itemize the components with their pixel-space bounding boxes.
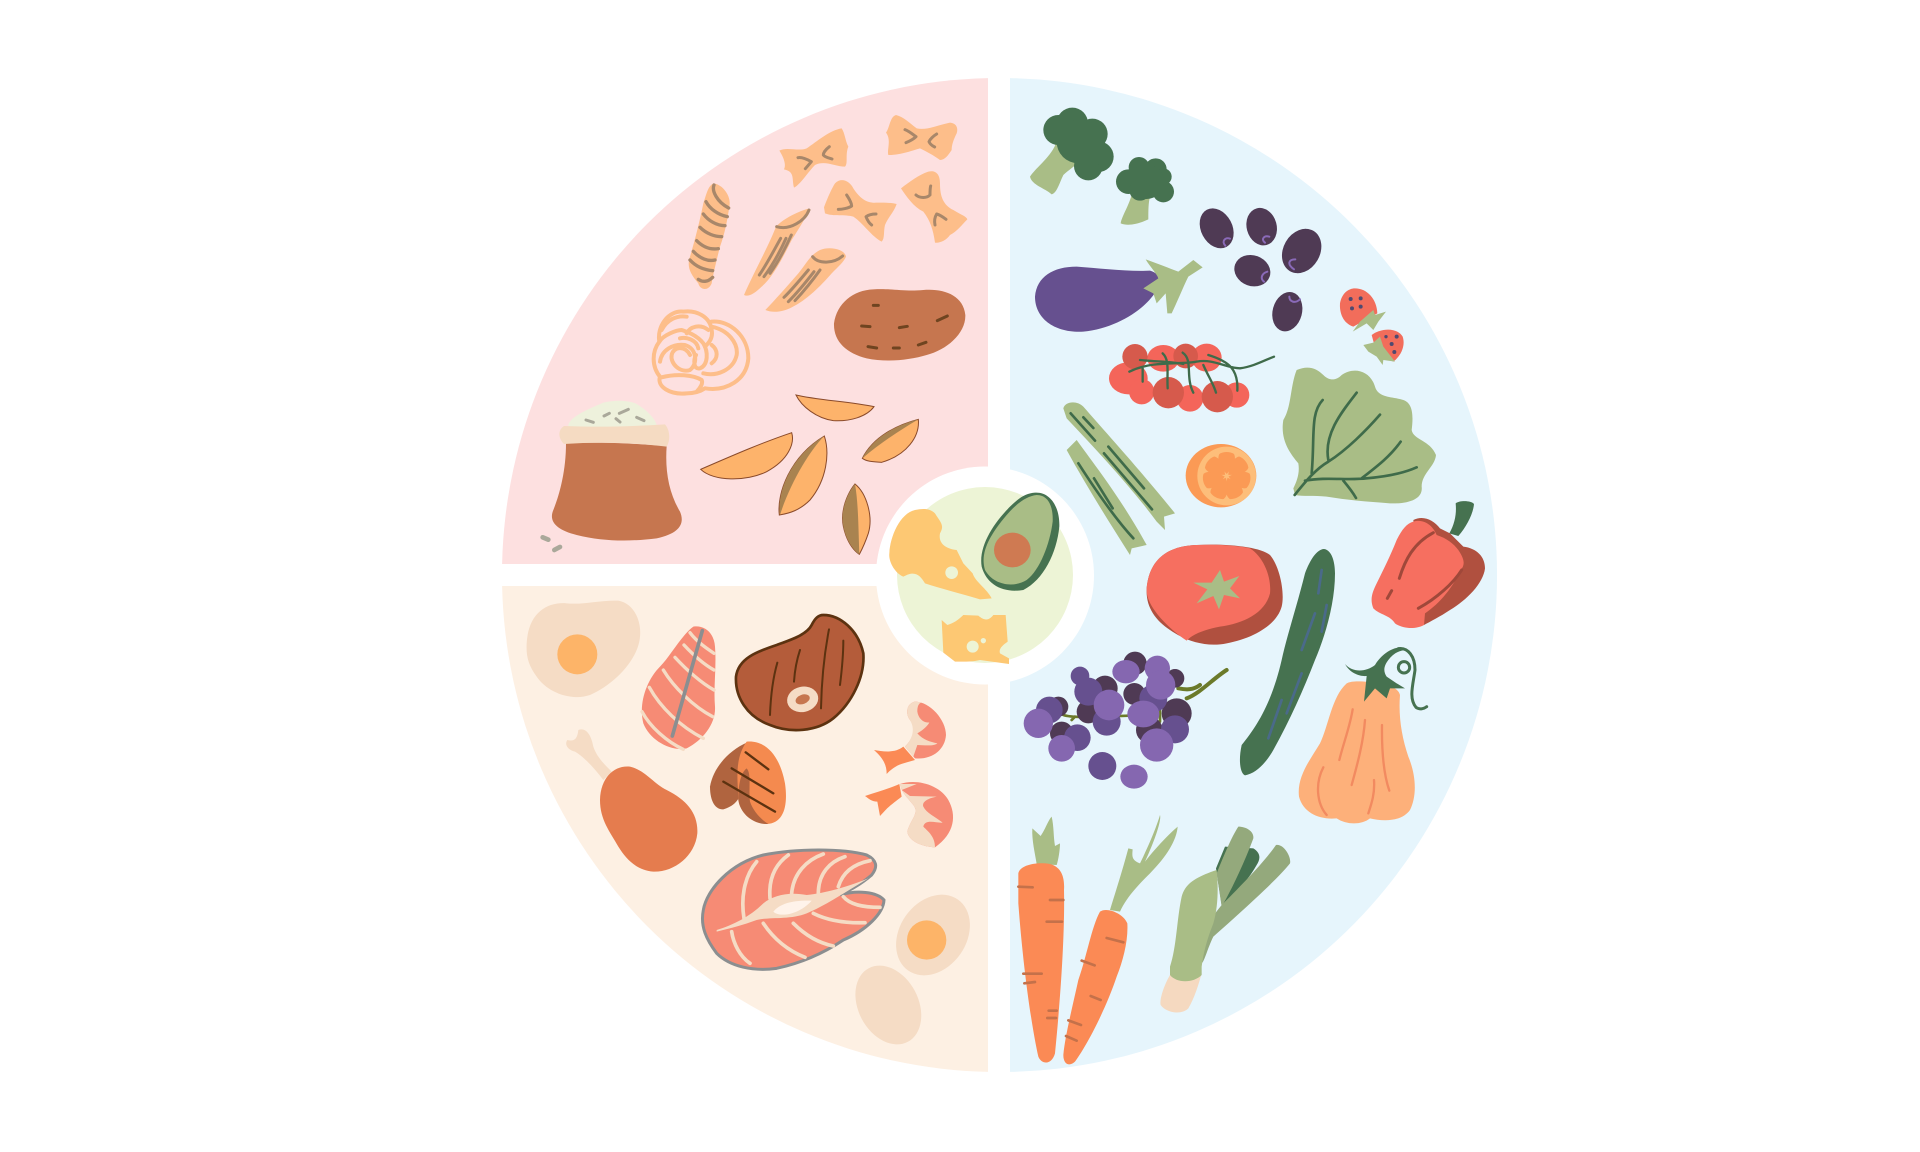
icon: lettuce leaf [1283, 368, 1436, 503]
icon: farfalle top left [779, 128, 848, 188]
icon: straight carrot [1018, 817, 1064, 1063]
icon: noodle nest [654, 311, 748, 394]
icon: beef steak [736, 615, 863, 730]
icon: chicken drumstick [566, 729, 697, 872]
icon: whole egg [842, 954, 934, 1056]
icon: eggplant [1035, 259, 1203, 332]
icon: cheese wedge [889, 509, 992, 599]
group: vegetables and fruit lower [1018, 501, 1485, 1064]
icon: leek [1160, 827, 1290, 1012]
icon: cucumber [1240, 549, 1335, 775]
circle background: pale green [897, 487, 1073, 663]
icon: salmon fillet [642, 626, 715, 749]
icon: avocado half [981, 493, 1059, 591]
group: carbohydrate foods [543, 115, 967, 554]
icon: halved boiled egg [881, 880, 985, 990]
icon: sack of rice [543, 401, 682, 550]
icon: penne pasta right [765, 248, 846, 312]
icon: farfalle right [901, 171, 967, 243]
icon: fried egg [527, 601, 640, 697]
icon: strawberries [1340, 288, 1404, 365]
icon: potato wedges [701, 395, 918, 554]
icon: shrimp upper [874, 702, 946, 774]
group: vegetables upper [1030, 108, 1436, 555]
icon: green beans [1063, 402, 1175, 555]
icon: small broccoli [1116, 157, 1174, 225]
quadrant background: pink [502, 78, 988, 564]
white ring [876, 466, 1094, 684]
icon: farfalle top right [886, 115, 957, 160]
icon: cheese block [942, 615, 1009, 664]
icon: potato [834, 289, 965, 361]
icon: salmon steak [702, 850, 884, 969]
icon: red tomato [1147, 545, 1283, 645]
group: protein foods [527, 601, 985, 1056]
icon: orange slice [1186, 444, 1256, 507]
icon: shrimp lower [865, 782, 953, 847]
icon: bunch of purple grapes [1024, 652, 1227, 789]
icon: butternut squash [1299, 647, 1427, 823]
half background: light blue [1010, 78, 1497, 1072]
group: shrimps [865, 702, 953, 847]
quadrant background: peach [502, 586, 988, 1072]
icon: dark beans [1193, 202, 1329, 335]
panel: protein quadrant [502, 586, 988, 1072]
icon: leaning carrot [1063, 815, 1178, 1064]
icon: large broccoli [1030, 108, 1114, 194]
group: farfalle pasta [779, 115, 967, 243]
icon: farfalle middle [824, 180, 897, 242]
group: healthy fat foods [889, 493, 1059, 664]
icon: penne pasta left [744, 208, 809, 296]
icon: grilled chicken breast [710, 742, 786, 824]
panel: vegetables and fruit half [1010, 78, 1497, 1072]
icon: red bell pepper [1372, 501, 1485, 628]
panel: healthy fats circle [876, 466, 1094, 684]
icon: cherry tomatoes on the vine [1109, 344, 1274, 412]
panel: carbohydrates quadrant [502, 78, 988, 564]
icon: fusilli pasta [689, 183, 730, 289]
